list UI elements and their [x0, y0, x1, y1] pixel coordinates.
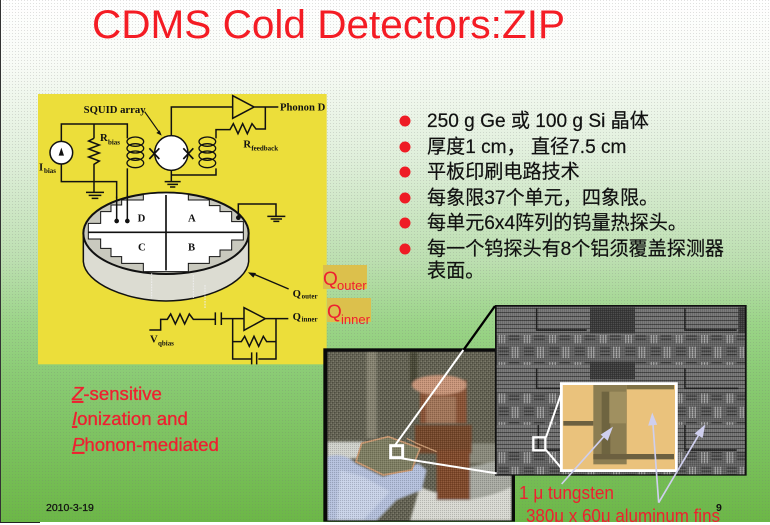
- label: Q inner: Q: [327, 302, 342, 323]
- circuit labels: SQUID array: [84, 105, 146, 116]
- Qouter arrow head: [248, 272, 256, 278]
- acronym text: ZIP: Phonon-mediated: [72, 434, 219, 455]
- zoom lines from photo to micrograph: [391, 306, 497, 473]
- circuit labels: B: [188, 242, 195, 253]
- label: Q inner: [327, 298, 371, 327]
- date: 2010-3-19: [46, 502, 94, 514]
- label: Q outer: [323, 265, 367, 293]
- acronym text: ZIP: Ionization and: [72, 408, 188, 429]
- circuit labels: qbias: [158, 340, 174, 348]
- panel: micrograph: [495, 305, 747, 476]
- bullet 2: 厚度1 cm， 直径7.5 cm: [427, 136, 626, 158]
- circuit labels: D: [138, 214, 146, 225]
- detector disc: [83, 192, 285, 301]
- circuit labels: R: [100, 133, 108, 144]
- circuit labels: C: [138, 242, 146, 253]
- circuit labels: Q: [293, 289, 301, 300]
- SQUID arrow head: [156, 130, 162, 136]
- bullet 1: 250 g Ge 或 100 g Si 晶体: [427, 110, 649, 132]
- circuit labels: Q: [293, 312, 301, 323]
- bullet 6: [400, 238, 724, 282]
- yellow panel background: [38, 94, 327, 364]
- charge amplifier circuit: [149, 274, 289, 364]
- page number: 9: [716, 502, 722, 514]
- circuit labels: I: [39, 162, 43, 173]
- disc lower traces: [152, 273, 205, 308]
- arrows: tungsten and aluminum fins: [562, 415, 704, 503]
- panel: detector photograph: [323, 348, 515, 522]
- panel: ZIP detector circuit diagram: [38, 94, 327, 364]
- circuit labels: Phonon D: [280, 102, 326, 113]
- bullet 3: 平板印刷电路技术: [427, 161, 580, 183]
- acronym text: ZIP: Z-sensitive: [71, 383, 162, 404]
- circuit labels: R: [243, 139, 251, 150]
- circuit labels: bias: [44, 167, 56, 175]
- circuit labels: A: [188, 214, 196, 225]
- title: CDMS Cold Detectors:ZIP: [92, 3, 565, 47]
- acronym text: ZIP: [71, 383, 219, 455]
- circuit labels: V: [150, 334, 158, 345]
- bullet list: [400, 110, 724, 282]
- label: Q outer: outer: [337, 278, 367, 293]
- current source arrow: [59, 148, 64, 156]
- circuit labels: bias: [108, 138, 120, 146]
- label: Q inner: inner: [341, 312, 371, 327]
- circuit labels: feedback: [251, 145, 278, 153]
- bullet 6: 每一个钨探头有8个铝须覆盖探测器: [427, 238, 724, 260]
- circuit labels: [39, 102, 326, 348]
- bullet 4: 每象限37个单元，四象限。: [427, 187, 658, 209]
- bullet 6: 表面。: [427, 260, 484, 282]
- SQUID readout circuit: [50, 96, 278, 198]
- label: Q outer: Q: [323, 269, 338, 290]
- circuit labels: outer: [302, 292, 318, 300]
- caption: tungsten: 1 μ tungsten: [519, 483, 614, 503]
- panel: magnified tungsten sensor inset: [533, 384, 676, 471]
- bullet 5: 每单元6x4阵列的钨量热探头。: [427, 212, 687, 234]
- photo and micrograph group: [323, 305, 747, 522]
- circuit labels: inner: [302, 316, 318, 324]
